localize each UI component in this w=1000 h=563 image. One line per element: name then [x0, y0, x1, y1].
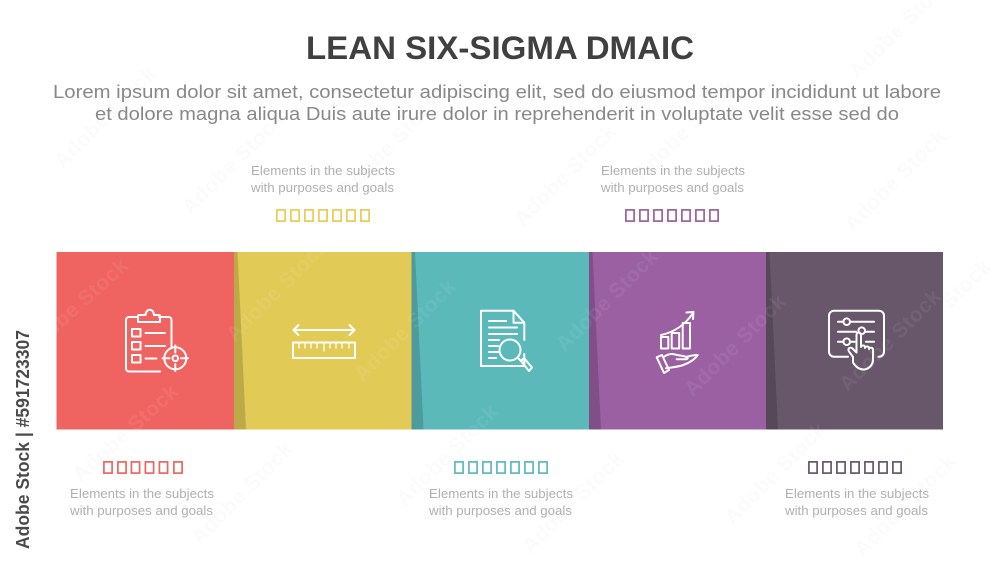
segmented bar [56, 252, 943, 430]
bottom caption: analyze: Elements in the subjects [429, 486, 574, 501]
watermarks on background: Adobe Stock [187, 438, 298, 549]
watermarks on bar: Adobe Stock [680, 290, 791, 401]
bottom caption: analyze: with purposes and goals [428, 503, 573, 518]
bottom caption: control [784, 486, 930, 518]
subtitle: Lorem ipsum dolor sit amet, consectetur adipiscing elit, sed do eiusmod tempor incididunt ut labore [53, 81, 941, 102]
icon: sliders panel with pointing hand [829, 311, 884, 370]
bottom label: define [104, 462, 182, 473]
watermarks on bar: Adobe Stock [187, 438, 298, 549]
top caption: measure: Elements in the subjects [251, 163, 396, 178]
panel shadow: improve [589, 252, 601, 430]
watermarks on background: Adobe Stock [178, 108, 289, 219]
top caption: improve [600, 163, 746, 195]
watermarks on background: Adobe Stock [68, 380, 183, 487]
bottom caption: control: Elements in the subjects [785, 486, 930, 501]
panel shadow: analyze [412, 252, 424, 430]
watermarks on bar: Adobe Stock [350, 275, 461, 386]
watermarks on background: Adobe Stock [720, 418, 831, 529]
watermarks on background: Adobe Stock [392, 400, 503, 511]
bottom caption: define: with purposes and goals [69, 503, 214, 518]
icon: document with magnifier [481, 311, 532, 371]
top caption: measure: with purposes and goals [250, 180, 395, 195]
top caption: improve: with purposes and goals [600, 180, 745, 195]
watermarks on background: Adobe Stock [840, 125, 951, 236]
watermarks on bar: Adobe Stock [392, 400, 503, 511]
bottom label: control [809, 462, 901, 473]
top label: improve [626, 210, 718, 221]
watermarks on background: Adobe Stock [518, 447, 629, 558]
subtitle: et dolore magna aliqua Duis aute irure dolor in reprehenderit in voluptate velit esse sed do [95, 103, 899, 124]
watermarks on background: Adobe Stock [50, 62, 161, 173]
title: LEAN SIX-SIGMA DMAIC [306, 30, 694, 66]
subtitle [53, 81, 941, 124]
watermarks on bar [56, 252, 942, 430]
watermarks on bar: Adobe Stock [18, 254, 133, 361]
panel: analyze [412, 252, 590, 430]
icon: growth chart on hand [657, 312, 698, 373]
bottom caption: define [69, 486, 215, 518]
icon: ruler with arrow [293, 325, 355, 358]
watermarks on background: Adobe Stock [885, 255, 996, 366]
watermarks on background: Adobe Stock [510, 120, 621, 231]
bottom caption: define: Elements in the subjects [70, 486, 215, 501]
panel: define [56, 252, 234, 430]
watermarks on bar: Adobe Stock [68, 380, 183, 487]
bottom label: analyze [455, 462, 547, 473]
stock id label: Adobe Stock | #591723307 [12, 330, 33, 549]
watermarks on bar: Adobe Stock [222, 235, 333, 346]
panel: improve [589, 252, 766, 430]
top label: measure [277, 210, 369, 221]
top caption: improve: Elements in the subjects [601, 163, 746, 178]
watermarks on background: Adobe Stock [850, 450, 961, 561]
watermarks on bar: Adobe Stock [720, 418, 831, 529]
panel: control [766, 252, 943, 430]
icon: clipboard with target [126, 310, 188, 372]
panel shadow: measure [234, 252, 246, 430]
watermarks on background: Adobe Stock [630, 75, 741, 186]
bottom caption: analyze [428, 486, 574, 518]
watermarks on bar: Adobe Stock [835, 285, 946, 396]
watermarks on background: Adobe Stock [335, 90, 446, 201]
watermarks on bar: Adobe Stock [552, 245, 663, 356]
bottom caption: control: with purposes and goals [784, 503, 929, 518]
panel: measure [234, 252, 412, 430]
panel shadow: control [766, 252, 778, 430]
top caption: measure [250, 163, 396, 195]
